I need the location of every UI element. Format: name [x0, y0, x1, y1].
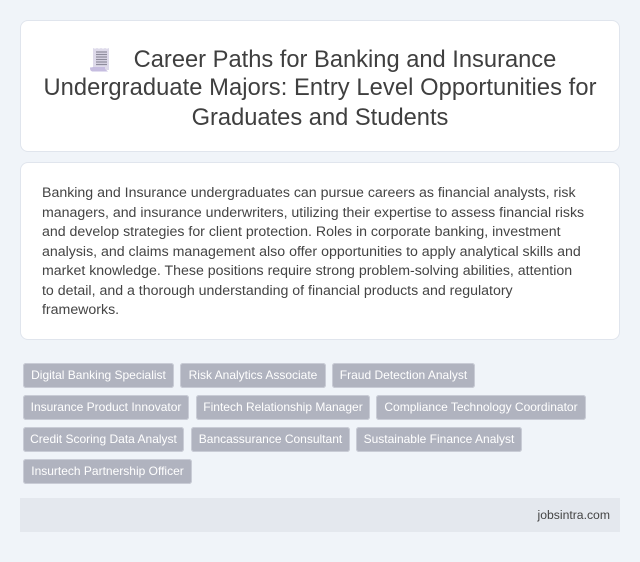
title text — [43, 47, 597, 130]
icon: scroll document — [90, 48, 109, 72]
description text: frameworks. — [42, 302, 119, 318]
title text: Graduates and Students — [192, 104, 448, 130]
description text: Banking and Insurance undergraduates can pursue careers as financial analysts, risk — [42, 185, 576, 201]
tag: Sustainable Finance Analyst — [364, 432, 514, 446]
tag — [196, 395, 370, 420]
title text: Career Paths for Banking and Insurance — [134, 47, 556, 73]
tag: Bancassurance Consultant — [199, 432, 342, 446]
description text: managers, and insurance underwriters, utilizing their expertise to assess financial risks — [42, 204, 584, 220]
description panel — [20, 162, 620, 340]
career tags — [23, 363, 586, 484]
description text: analysis, and claims management also offer opportunities to apply analytical skills and — [42, 244, 581, 260]
tag: Risk Analytics Associate — [189, 368, 317, 382]
title panel — [20, 20, 620, 152]
tag — [23, 363, 174, 388]
tag — [191, 427, 350, 452]
footer source: jobsintra.com — [538, 508, 610, 522]
tag: Insurance Product Innovator — [31, 400, 181, 414]
tag — [23, 427, 184, 452]
tag: Insurtech Partnership Officer — [31, 464, 184, 478]
footer bar — [20, 498, 620, 532]
tag: Digital Banking Specialist — [31, 368, 166, 382]
tag — [356, 427, 522, 452]
tag — [23, 459, 192, 484]
tag: Fraud Detection Analyst — [340, 368, 467, 382]
tag: Credit Scoring Data Analyst — [30, 432, 177, 446]
title text: Undergraduate Majors: Entry Level Opportunities for — [43, 75, 597, 101]
tag — [332, 363, 475, 388]
tag — [180, 363, 326, 388]
tag: Compliance Technology Coordinator — [384, 400, 578, 414]
tag — [376, 395, 586, 420]
description text — [42, 185, 584, 318]
tag: Fintech Relationship Manager — [203, 400, 363, 414]
description text: and develop strategies for client protection. Roles in corporate banking, investment — [42, 224, 561, 240]
description text: to detail, and a thorough understanding of financial products and regulatory — [42, 282, 513, 298]
description text: market knowledge. These positions require strong problem-solving abilities, attention — [42, 263, 572, 279]
tag — [23, 395, 189, 420]
